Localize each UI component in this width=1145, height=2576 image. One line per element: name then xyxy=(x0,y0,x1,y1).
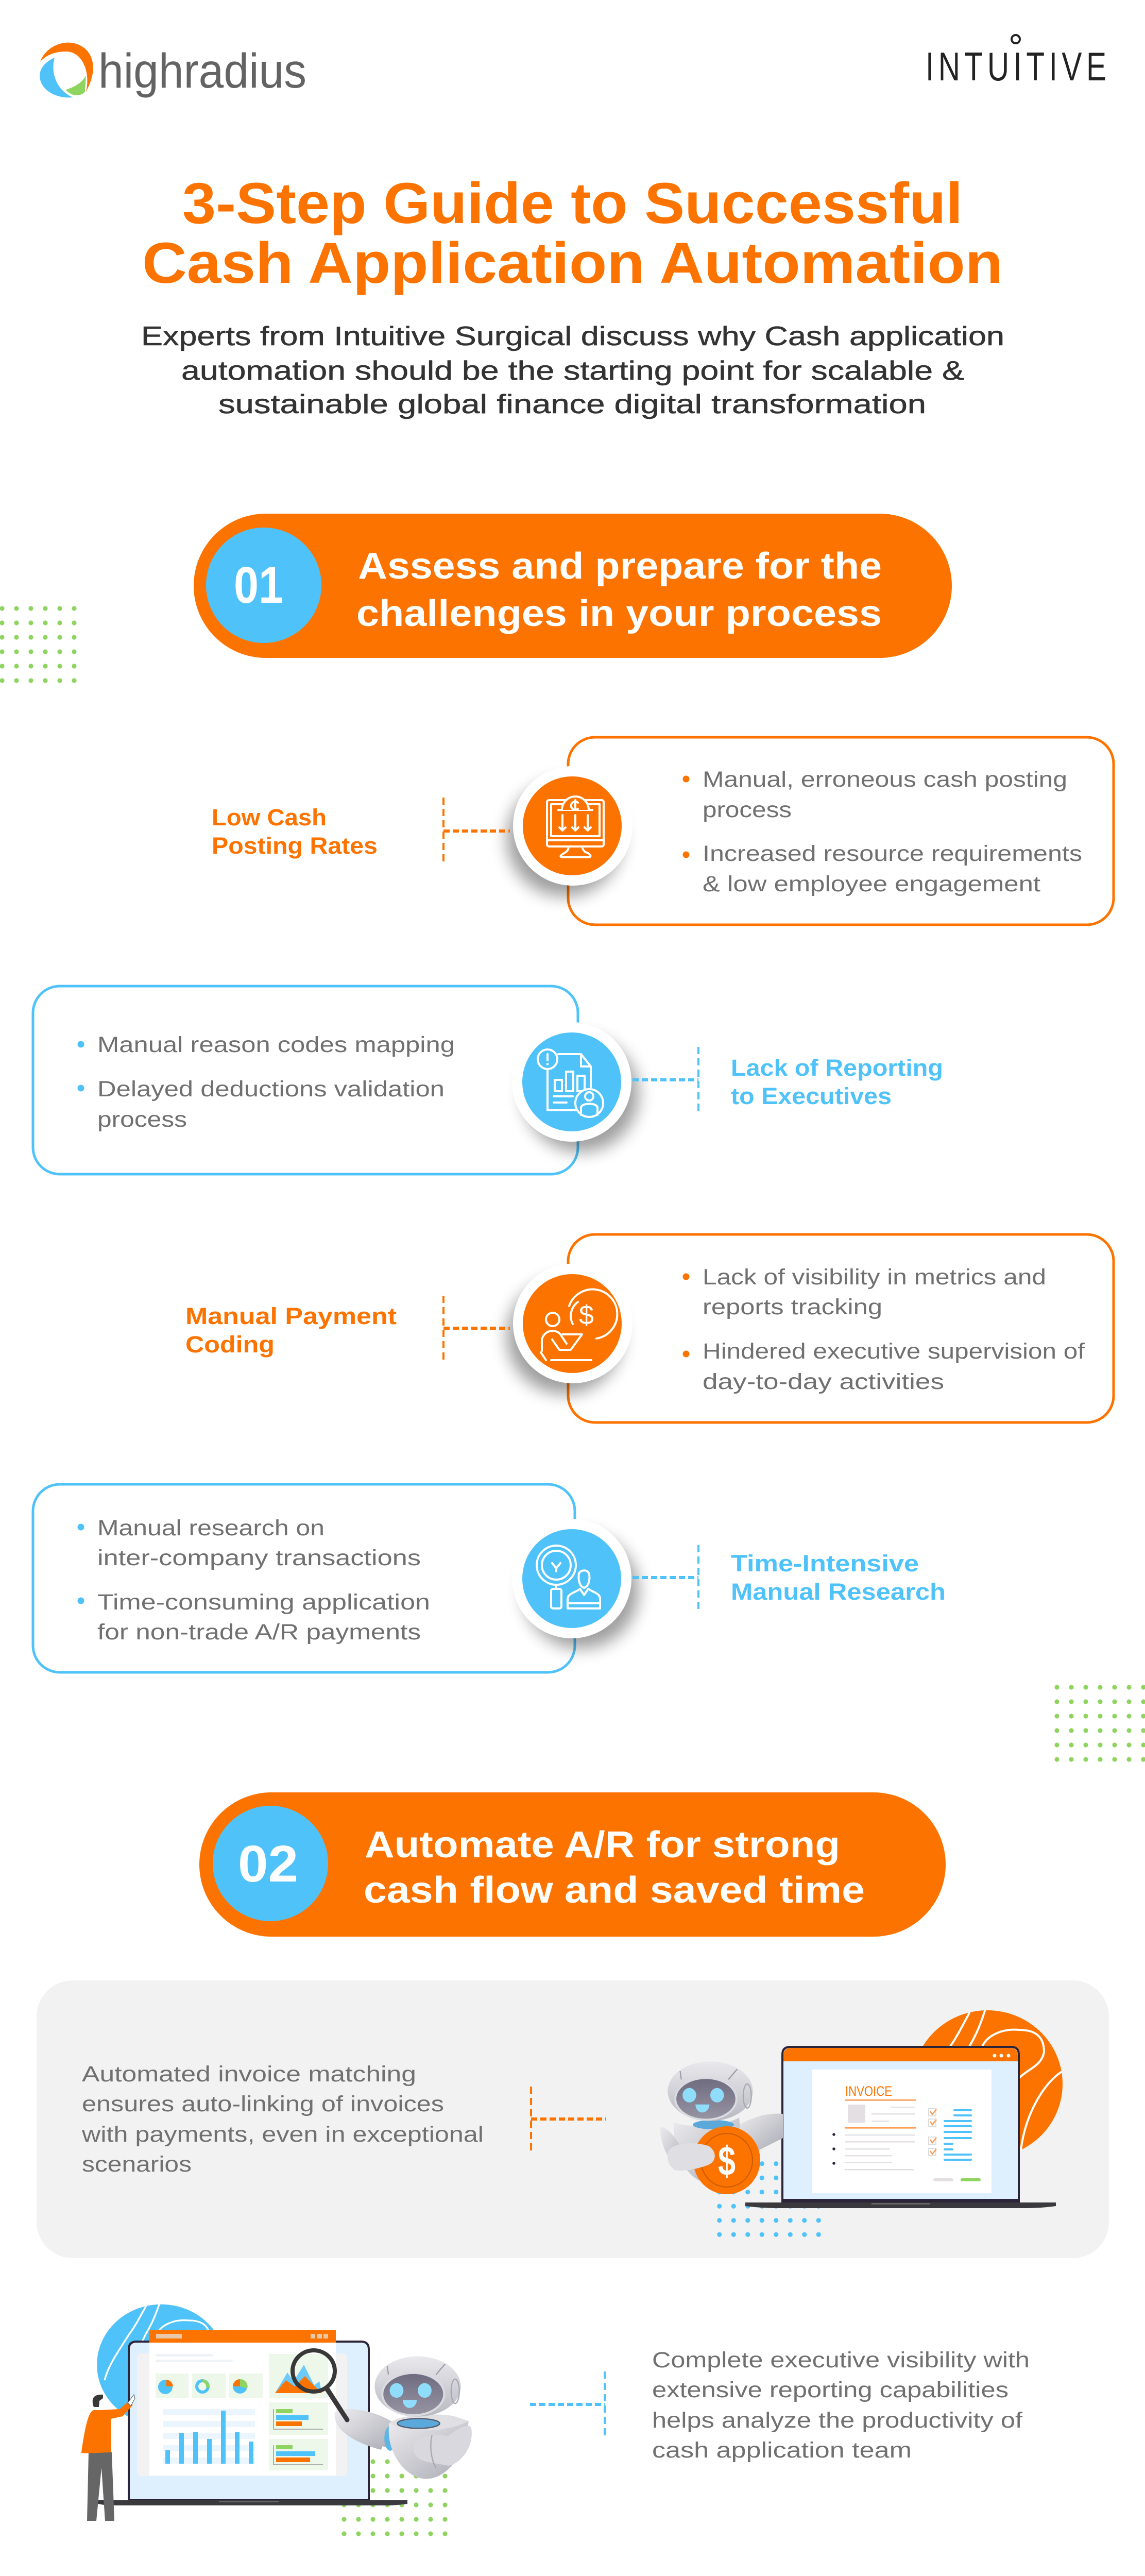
bullets xyxy=(77,1516,430,1645)
dots: green top left xyxy=(0,601,81,688)
connector xyxy=(531,2087,606,2153)
subtitle: Experts from Intuitive Surgical discuss why Cash application xyxy=(141,321,1004,351)
label: Posting Rates xyxy=(212,833,378,859)
label xyxy=(731,1055,943,1109)
icon: report with alert xyxy=(538,1049,603,1117)
bullets: Manual research on xyxy=(97,1516,324,1540)
panel: manual payment coding xyxy=(185,1234,1114,1422)
text: Automated invoice matching xyxy=(82,2062,416,2087)
label: Manual Research xyxy=(731,1579,946,1605)
panel: low cash posting rates xyxy=(212,737,1114,925)
text: helps analyze the productivity of xyxy=(652,2408,1023,2433)
bullets: Delayed deductions validation xyxy=(97,1077,445,1101)
bullets: & low employee engagement xyxy=(703,872,1040,896)
icon: monitor with dollar xyxy=(547,796,604,857)
robot xyxy=(660,2061,783,2194)
icon: clock magnifier and person xyxy=(537,1546,600,1608)
text: Complete executive visibility with xyxy=(652,2348,1030,2372)
text: scenarios xyxy=(82,2152,192,2177)
subtitle: automation should be the starting point for scalable & xyxy=(181,356,964,386)
icon: person with dollar: $ xyxy=(579,1300,594,1330)
bullets xyxy=(77,1032,455,1132)
subtitle: sustainable global finance digital transformation xyxy=(218,389,926,419)
connector xyxy=(530,2371,605,2439)
bullets: process xyxy=(97,1107,187,1132)
bullets: Time-consuming application xyxy=(97,1590,430,1615)
bullets: Manual reason codes mapping xyxy=(97,1032,455,1057)
label xyxy=(212,804,378,859)
illustration: dashboard, person and robot xyxy=(81,2304,472,2541)
title: Cash Application Automation xyxy=(142,231,1003,295)
logo: Intuitive: INTUITIVE xyxy=(926,44,1106,89)
bullets: inter-company transactions xyxy=(97,1546,421,1570)
bullets: for non-trade A/R payments xyxy=(97,1620,421,1645)
person xyxy=(81,2394,135,2521)
step 02 banner: Automate A/R for strong xyxy=(365,1824,840,1866)
text: cash application team xyxy=(652,2438,912,2463)
bullets: Increased resource requirements xyxy=(703,841,1082,866)
title xyxy=(142,171,1003,295)
connector xyxy=(633,1545,698,1612)
step 01 banner: Assess and prepare for the xyxy=(358,546,882,587)
connector xyxy=(443,1296,510,1362)
illustration: laptop invoice and robot: INVOICE xyxy=(845,2083,892,2099)
step 01 banner: challenges in your process xyxy=(356,593,882,634)
subtitle xyxy=(141,321,1004,419)
label: Coding xyxy=(185,1331,275,1358)
text: with payments, even in exceptional xyxy=(81,2122,484,2147)
connector xyxy=(443,798,510,865)
robot: $ xyxy=(718,2138,736,2184)
dots: green right xyxy=(1050,1680,1145,1767)
illustration: laptop invoice and robot xyxy=(660,2010,1063,2242)
icon: person with dollar xyxy=(541,1290,617,1360)
step 01 banner: 01 xyxy=(234,556,283,614)
label: Low Cash xyxy=(212,804,327,831)
panel: automated invoice matching xyxy=(37,1980,1109,2258)
bullets: process xyxy=(703,798,792,822)
label: Manual Payment xyxy=(185,1303,397,1329)
step 01 banner xyxy=(194,514,952,658)
bullets: Lack of visibility in metrics and xyxy=(703,1265,1046,1290)
bullets: Hindered executive supervision of xyxy=(703,1339,1085,1364)
bullets: Manual, erroneous cash posting xyxy=(703,767,1067,792)
text xyxy=(81,2062,484,2177)
bullets xyxy=(683,1265,1085,1394)
bullets: day-to-day activities xyxy=(703,1369,944,1394)
panel: executive visibility xyxy=(81,2304,1030,2541)
step 02 banner: 02 xyxy=(238,1835,298,1893)
connector xyxy=(633,1047,698,1114)
text xyxy=(652,2348,1030,2463)
label xyxy=(185,1303,397,1358)
panel: lack of reporting xyxy=(33,986,943,1174)
logo: highradius: highradius xyxy=(98,44,306,98)
label: Lack of Reporting xyxy=(731,1055,943,1081)
label: to Executives xyxy=(731,1083,892,1109)
bullets: reports tracking xyxy=(703,1295,882,1319)
label: Time-Intensive xyxy=(731,1550,919,1577)
text: ensures auto-linking of invoices xyxy=(82,2092,444,2116)
panel: time-intensive manual research xyxy=(33,1484,946,1672)
step 02 banner xyxy=(199,1792,946,1937)
text: extensive reporting capabilities xyxy=(652,2378,1009,2402)
step 02 banner: cash flow and saved time xyxy=(364,1870,865,1911)
bullets xyxy=(683,767,1082,896)
title: 3-Step Guide to Successful xyxy=(182,171,963,235)
label xyxy=(731,1550,946,1605)
